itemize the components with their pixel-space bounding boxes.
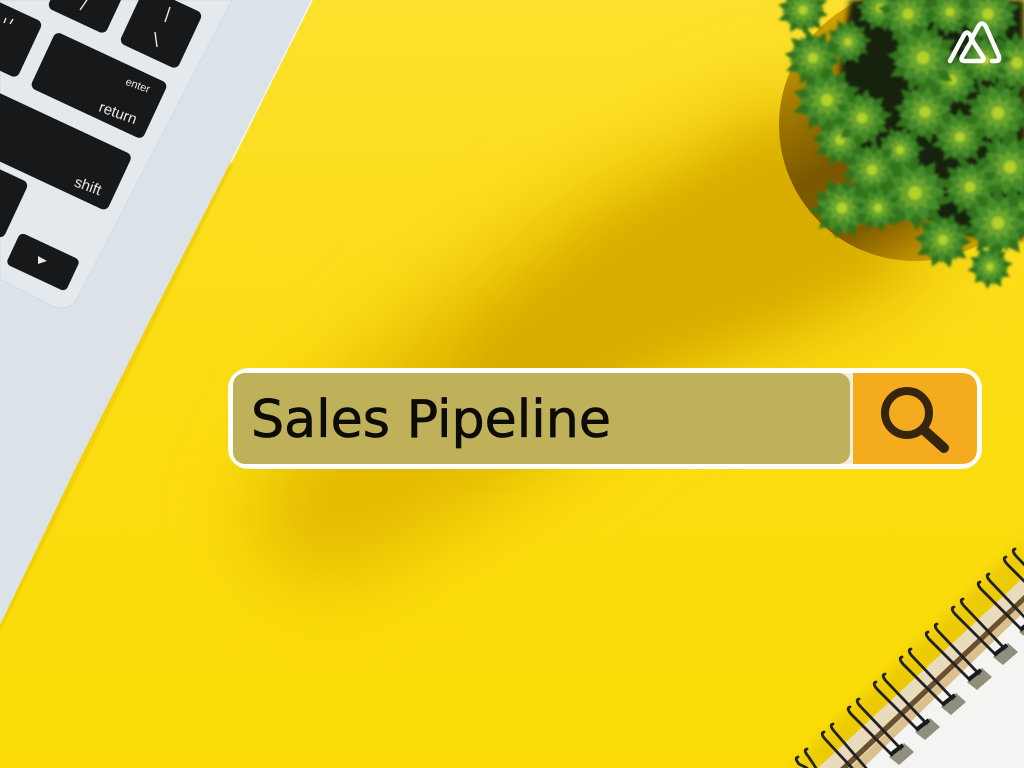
search text: Sales Pipeline: [251, 390, 611, 450]
key legends: enter: [124, 76, 152, 96]
paper edge: [818, 577, 1024, 768]
succulent rosettes: [772, 0, 1024, 297]
keyboard keys: [0, 0, 203, 292]
laptop body: [0, 0, 313, 625]
key legends: [4, 0, 170, 264]
laptop rim highlight: [231, 0, 312, 162]
search bar frame: [230, 370, 980, 466]
keyboard plate: [0, 0, 232, 308]
pot: [779, 0, 1024, 261]
white page: [863, 612, 1024, 768]
ring shadows: [790, 540, 1024, 768]
key legends: return: [97, 99, 139, 128]
key legends: shift: [72, 174, 104, 199]
spiral binding rings: [796, 549, 1024, 768]
icon: magnifying glass: [885, 391, 944, 448]
laptop edge shadow: [0, 165, 233, 632]
search button: [853, 373, 977, 464]
search input field: [233, 373, 850, 464]
search bar: [230, 370, 980, 466]
logo: [950, 24, 999, 61]
notebook: [790, 540, 1024, 768]
laptop: [0, 0, 313, 632]
plant in pot: [772, 0, 1024, 297]
foliage shade: [840, 0, 1024, 240]
